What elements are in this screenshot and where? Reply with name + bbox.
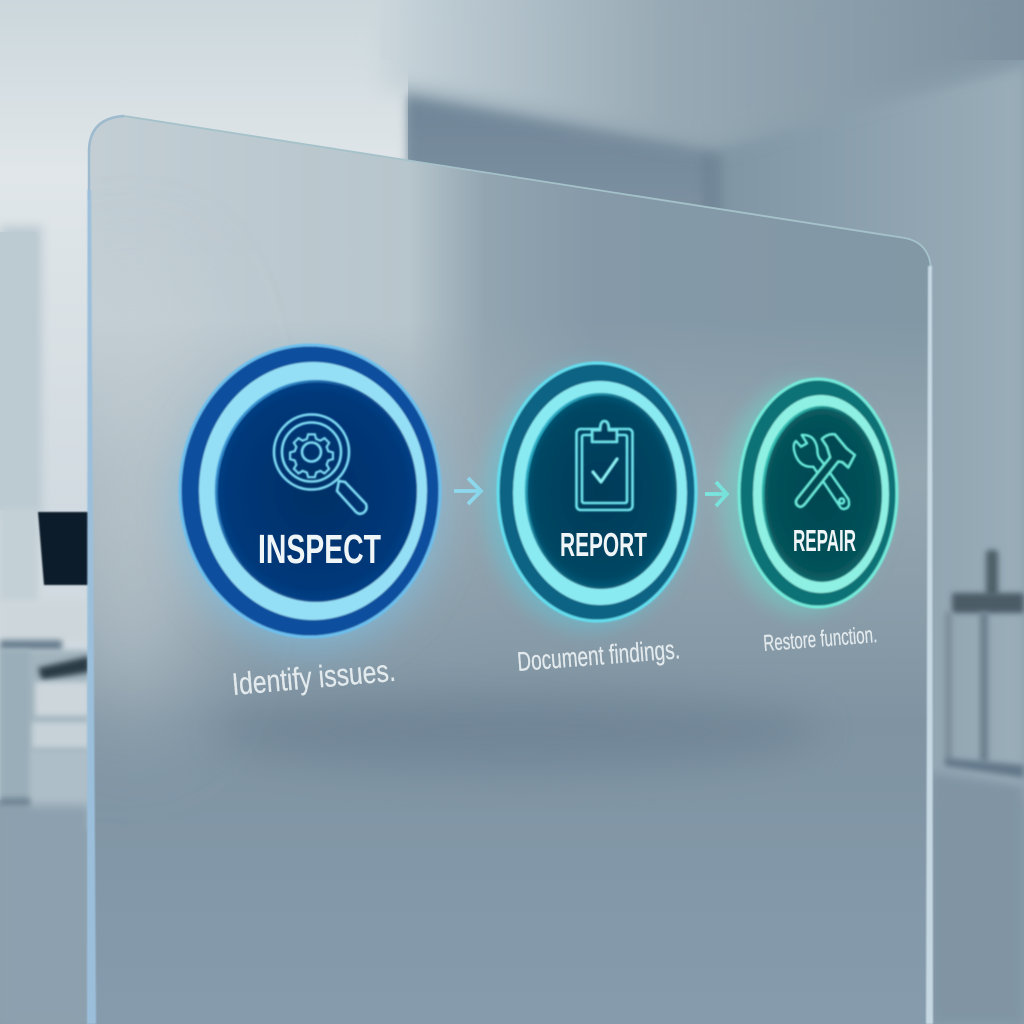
label: INSPECT: INSPECT [258, 526, 381, 572]
step: inspect [178, 345, 442, 650]
step: repair [722, 379, 897, 614]
caption: identify issues: Identify issues. [231, 653, 397, 702]
label: REPAIR: REPAIR [793, 523, 856, 558]
panel: glass board [60, 116, 933, 1024]
blurred monitor [38, 512, 90, 585]
step: report [484, 363, 696, 630]
arrow: inspect to report [454, 478, 481, 504]
blurred desk and chair [0, 508, 90, 1024]
label: REPORT: REPORT [560, 526, 647, 563]
caption: document findings: Document findings. [516, 634, 681, 677]
panel edge [124, 116, 931, 270]
icon: magnifier with gear [274, 414, 367, 514]
caption: restore function: Restore function. [762, 621, 878, 656]
icon: wrench and hammer [794, 434, 855, 509]
blurred side table [930, 550, 1024, 1024]
arrow: report to repair [705, 482, 727, 506]
icon: clipboard with check [576, 421, 632, 510]
left wall shade [0, 226, 42, 516]
